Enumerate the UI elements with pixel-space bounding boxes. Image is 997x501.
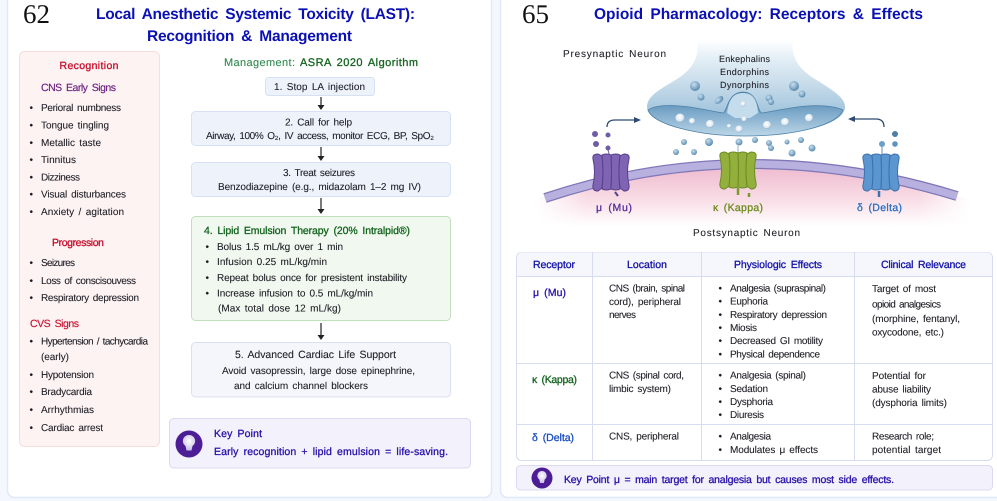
row: mu: Target of most — [872, 284, 936, 295]
step 4: lipid emulsion — [192, 216, 450, 320]
panel: recognition — [20, 52, 160, 446]
callout: LAST key point — [170, 418, 470, 468]
row: kappa: Diuresis — [730, 410, 764, 421]
receptor labels: μ (Mu) — [596, 202, 632, 214]
label: endogenous peptides: Endorphins — [720, 67, 770, 77]
callout: LAST key point: Early recognition + lipid emulsion = life-saving. — [214, 446, 448, 458]
heading: CNS early signs: CNS Early Signs — [41, 82, 116, 94]
arrow: mu feedback — [607, 117, 641, 127]
arrow: step 3 to 4 — [318, 198, 324, 214]
receptor: kappa — [720, 146, 756, 197]
label: endogenous peptides — [719, 54, 770, 90]
list: CVS signs: • — [30, 336, 34, 348]
list: CNS early signs: • — [30, 103, 34, 114]
arrow: delta feedback — [848, 116, 884, 127]
table header: Clinical Relevance — [881, 259, 966, 271]
table: receptors — [516, 252, 992, 460]
step 4: lipid emulsion: • — [206, 257, 210, 268]
list: CVS signs: • — [30, 370, 34, 381]
row: delta: • — [718, 445, 722, 456]
list: progression — [30, 258, 139, 304]
row: delta — [532, 432, 941, 456]
receptor: mu — [592, 131, 629, 196]
list: CVS signs: Arrhythmias — [41, 405, 94, 416]
step 4: lipid emulsion: Infusion 0.25 mL/kg/min — [217, 257, 327, 268]
list: progression: Loss of conscisouvess — [41, 276, 136, 287]
icon: light bulb — [532, 468, 552, 488]
list: CNS early signs: Tongue tingling — [41, 120, 109, 132]
step 4: lipid emulsion: • — [206, 288, 210, 300]
row: delta: • — [718, 432, 722, 442]
title: LAST: Local Anesthetic Systemic Toxicity (LAST): — [96, 6, 415, 23]
list: CNS early signs: Tinnitus — [41, 155, 76, 166]
step 1 — [266, 78, 374, 96]
row: mu: nerves — [609, 310, 636, 321]
list: progression: • — [30, 293, 34, 304]
list: CVS signs: • — [30, 405, 34, 416]
step 4: lipid emulsion: 4. Lipid Emulsion Therapy (20% Intralpid®) — [204, 225, 410, 237]
step 4: lipid emulsion: Bolus 1.5 mL/kg over 1 min — [217, 242, 343, 253]
list: progression: • — [30, 276, 34, 287]
row: mu: • — [718, 323, 722, 334]
step 4: lipid emulsion: • — [206, 242, 210, 253]
list: progression: • — [30, 258, 34, 269]
row: mu: μ (Mu) — [533, 287, 566, 299]
label: presynaptic neuron: Presynaptic Neuron — [563, 49, 666, 60]
row: mu: opioid analgesics — [872, 300, 941, 310]
list: CVS signs: Hypertension / tachycardia — [41, 336, 148, 348]
list: CNS early signs: • — [30, 172, 34, 184]
list: progression: Seizures — [41, 258, 75, 269]
label: endogenous peptides: Dynorphins — [720, 80, 770, 90]
heading: management: Management: — [224, 57, 295, 69]
row: mu: • — [718, 284, 722, 294]
step 4: lipid emulsion: • — [206, 273, 210, 284]
arrow: step 2 to 3 — [318, 147, 324, 161]
heading: management — [224, 57, 418, 69]
row: kappa — [532, 370, 947, 421]
row: mu: cord), peripheral — [609, 297, 681, 308]
row: kappa: Analgesia (spinal) — [730, 370, 806, 382]
arrow: step 1 to 2 — [318, 97, 324, 110]
list: CVS signs: Hypotension — [41, 370, 94, 381]
row: delta: δ (Delta) — [532, 432, 574, 444]
step 5: Avoid vasopressin, large dose epinephrine, — [222, 366, 415, 377]
list: CVS signs: • — [30, 387, 34, 398]
heading: management: ASRA 2020 Algorithm — [300, 57, 418, 69]
step 2: 2. Call for help — [285, 118, 352, 128]
heading: progression: Progression — [52, 237, 104, 249]
list: CVS signs — [30, 336, 148, 434]
list: CNS early signs: • — [30, 207, 34, 218]
postsynaptic membrane — [544, 159, 958, 220]
row: kappa: • — [718, 370, 722, 382]
list: CVS signs: Bradycardia — [41, 387, 92, 398]
row: kappa: Sedation — [730, 384, 768, 395]
receptor labels: δ (Delta) — [857, 202, 902, 214]
panel: opioid card — [500, 0, 997, 498]
step 5 — [192, 342, 450, 397]
list: CNS early signs: Visual disturbances — [41, 190, 126, 200]
icon: light bulb — [176, 430, 202, 458]
title: LAST — [96, 6, 415, 45]
row: mu: Respiratory depression — [730, 310, 827, 321]
step 5: and calcium channel blockers — [234, 381, 368, 392]
list: CNS early signs: • — [30, 120, 34, 132]
row: mu: • — [718, 310, 722, 321]
row: mu: • — [718, 350, 722, 360]
step 4: lipid emulsion: Repeat bolus once for presistent instability — [217, 273, 407, 284]
title: LAST: Recognition & Management — [147, 28, 352, 45]
row: kappa: (dysphoria limits) — [872, 398, 947, 409]
step 3: Benzodiazepine (e.g., midazolam 1–2 mg IV) — [218, 182, 421, 193]
row: mu: • — [718, 296, 722, 308]
step 3: 3. Treat seizures — [283, 168, 355, 179]
row: kappa: CNS (spinal cord, — [609, 370, 684, 382]
heading: recognition: Recognition — [60, 60, 119, 72]
table header: Location — [627, 259, 667, 271]
list: CVS signs: • — [30, 423, 34, 434]
callout: LAST key point: Key Point — [214, 428, 262, 440]
callout: opioid key point: Key Point μ = main target for analgesia but causes most side effects. — [564, 474, 894, 486]
step 4: lipid emulsion: Increase infusion to 0.5 mL/kg/min — [217, 288, 373, 300]
row: kappa: Dysphoria — [730, 397, 773, 408]
row: mu: CNS (brain, spinal — [609, 284, 685, 294]
row: delta: CNS, peripheral — [609, 432, 679, 442]
row: delta: Modulates μ effects — [730, 445, 818, 456]
row: mu — [533, 284, 960, 360]
list: CNS early signs: Dizziness — [41, 172, 80, 184]
table header: Physiologic Effects — [734, 259, 822, 271]
list: CNS early signs: Anxiety / agitation — [41, 207, 124, 218]
presynaptic terminal — [647, 40, 845, 136]
row: mu: Physical dependence — [730, 350, 820, 360]
table header: Receptor — [533, 259, 576, 271]
receptor: delta — [863, 131, 899, 197]
step 4: lipid emulsion: (Max total dose 12 mL/kg) — [218, 304, 341, 314]
row: delta: Analgesia — [730, 432, 771, 442]
list: CVS signs: (early) — [41, 352, 69, 363]
list: CNS early signs: Metallic taste — [41, 138, 101, 149]
row: mu: Miosis — [730, 323, 757, 334]
receptor labels: κ (Kappa) — [713, 202, 763, 214]
heading: CVS signs: CVS Signs — [30, 318, 79, 330]
title: opioid: Opioid Pharmacology: Receptors & Effects — [594, 6, 923, 23]
step 5: 5. Advanced Cardiac Life Support — [235, 349, 396, 361]
step 1: 1. Stop LA injection — [274, 82, 365, 93]
row: kappa: • — [718, 384, 722, 395]
table header — [533, 259, 966, 271]
row: kappa: • — [718, 397, 722, 408]
row: mu: Analgesia (supraspinal) — [730, 284, 826, 294]
list: CNS early signs: Perioral numbness — [41, 103, 121, 114]
row: kappa: Potential for — [872, 371, 927, 382]
label: postsynaptic neuron: Postsynaptic Neuron — [693, 228, 800, 239]
step 3 — [192, 162, 450, 196]
list: CNS early signs: • — [30, 155, 34, 166]
receptor labels — [596, 202, 902, 214]
row: delta: potential target — [872, 445, 941, 456]
step 2 — [192, 112, 450, 146]
row: kappa: abuse liability — [872, 384, 931, 396]
row: mu: Euphoria — [730, 296, 768, 308]
list: CNS early signs: • — [30, 190, 34, 200]
list: progression: Respiratory depression — [41, 293, 139, 304]
step 2: Airway, 100% O₂, IV access, monitor ECG, BP, SpO₂ — [206, 131, 434, 142]
row: kappa: limbic system) — [609, 384, 671, 395]
arrow: step 4 to 5 — [318, 323, 324, 340]
row: mu: • — [718, 336, 722, 347]
label: endogenous peptides: Enkephalins — [719, 54, 770, 64]
diagram: synapse — [535, 40, 970, 239]
vesicles — [673, 81, 816, 156]
callout: opioid key point — [516, 466, 992, 490]
row: mu: (morphine, fentanyl, — [872, 314, 960, 325]
list: CNS early signs — [30, 103, 126, 218]
row: mu: Decreased GI motility — [730, 336, 823, 347]
row: delta: Research role; — [872, 432, 934, 442]
list: CVS signs: Cardiac arrest — [41, 423, 103, 434]
row: mu: oxycodone, etc.) — [872, 328, 944, 338]
row: kappa: κ (Kappa) — [532, 374, 577, 386]
panel: LAST card — [8, 0, 492, 498]
row: kappa: • — [718, 410, 722, 421]
list: CNS early signs: • — [30, 138, 34, 149]
